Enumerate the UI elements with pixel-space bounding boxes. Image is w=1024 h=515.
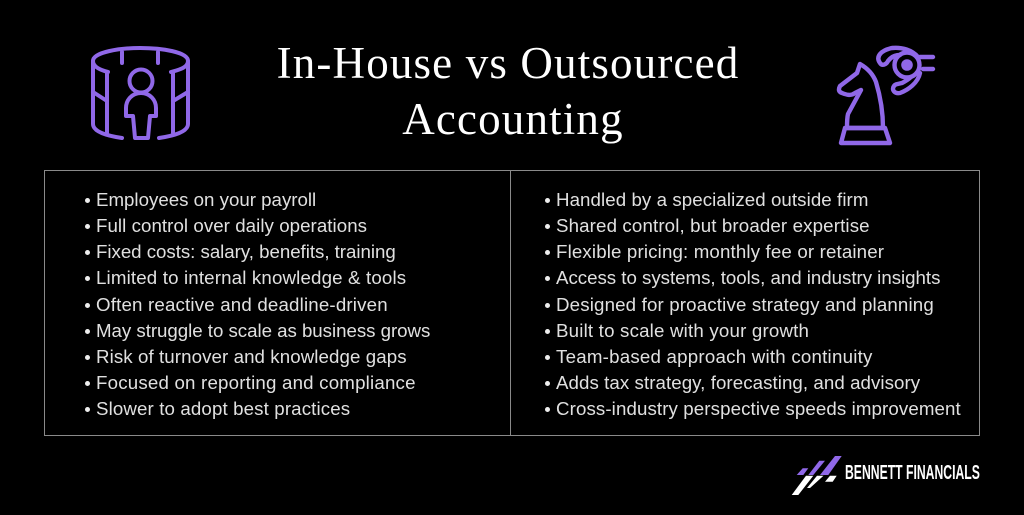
title: Accounting	[402, 94, 624, 144]
panel: outsourced list: Designed for proactive strategy and planning	[556, 294, 934, 315]
logo: Bennett Financials	[792, 456, 980, 495]
panel: outsourced list: Built to scale with your growth	[556, 320, 809, 341]
divider	[510, 171, 511, 435]
panel: outsourced list: Shared control, but broader expertise	[556, 215, 870, 236]
panel: in-house list: Full control over daily operations	[96, 215, 367, 236]
panel: outsourced list	[545, 189, 961, 419]
panel: outsourced list: Handled by a specialized outside firm	[556, 189, 869, 210]
panel: in-house list: Focused on reporting and compliance	[96, 372, 416, 393]
panel: outsourced list: Team-based approach with continuity	[556, 346, 873, 367]
panel: in-house list: Slower to adopt best practices	[96, 398, 350, 419]
icon: logo mark	[792, 456, 842, 495]
panel: in-house list: Employees on your payroll	[96, 189, 316, 210]
logo text: BENNETT FINANCIALS	[845, 462, 980, 484]
panel: in-house list: Limited to internal knowledge & tools	[96, 267, 406, 288]
title: In-House vs Outsourced	[277, 38, 739, 88]
panel: outsourced list: Cross-industry perspective speeds improvement	[556, 398, 961, 419]
panel: outsourced list: Access to systems, tools, and industry insights	[556, 267, 940, 288]
panel: in-house list: Risk of turnover and knowledge gaps	[96, 346, 407, 367]
panel: in-house list: May struggle to scale as business grows	[96, 320, 430, 341]
comparison table	[44, 170, 980, 436]
title	[277, 38, 739, 144]
icon: chess knight with gear	[836, 46, 936, 146]
panel: in-house list: Often reactive and deadline-driven	[96, 294, 388, 315]
panel: outsourced list: Adds tax strategy, forecasting, and advisory	[556, 372, 920, 393]
panel: in-house list: Fixed costs: salary, benefits, training	[96, 241, 396, 262]
panel: outsourced list: Flexible pricing: monthly fee or retainer	[556, 241, 884, 262]
icon: person in circular enclosure	[90, 46, 190, 140]
panel: in-house list	[85, 189, 430, 419]
